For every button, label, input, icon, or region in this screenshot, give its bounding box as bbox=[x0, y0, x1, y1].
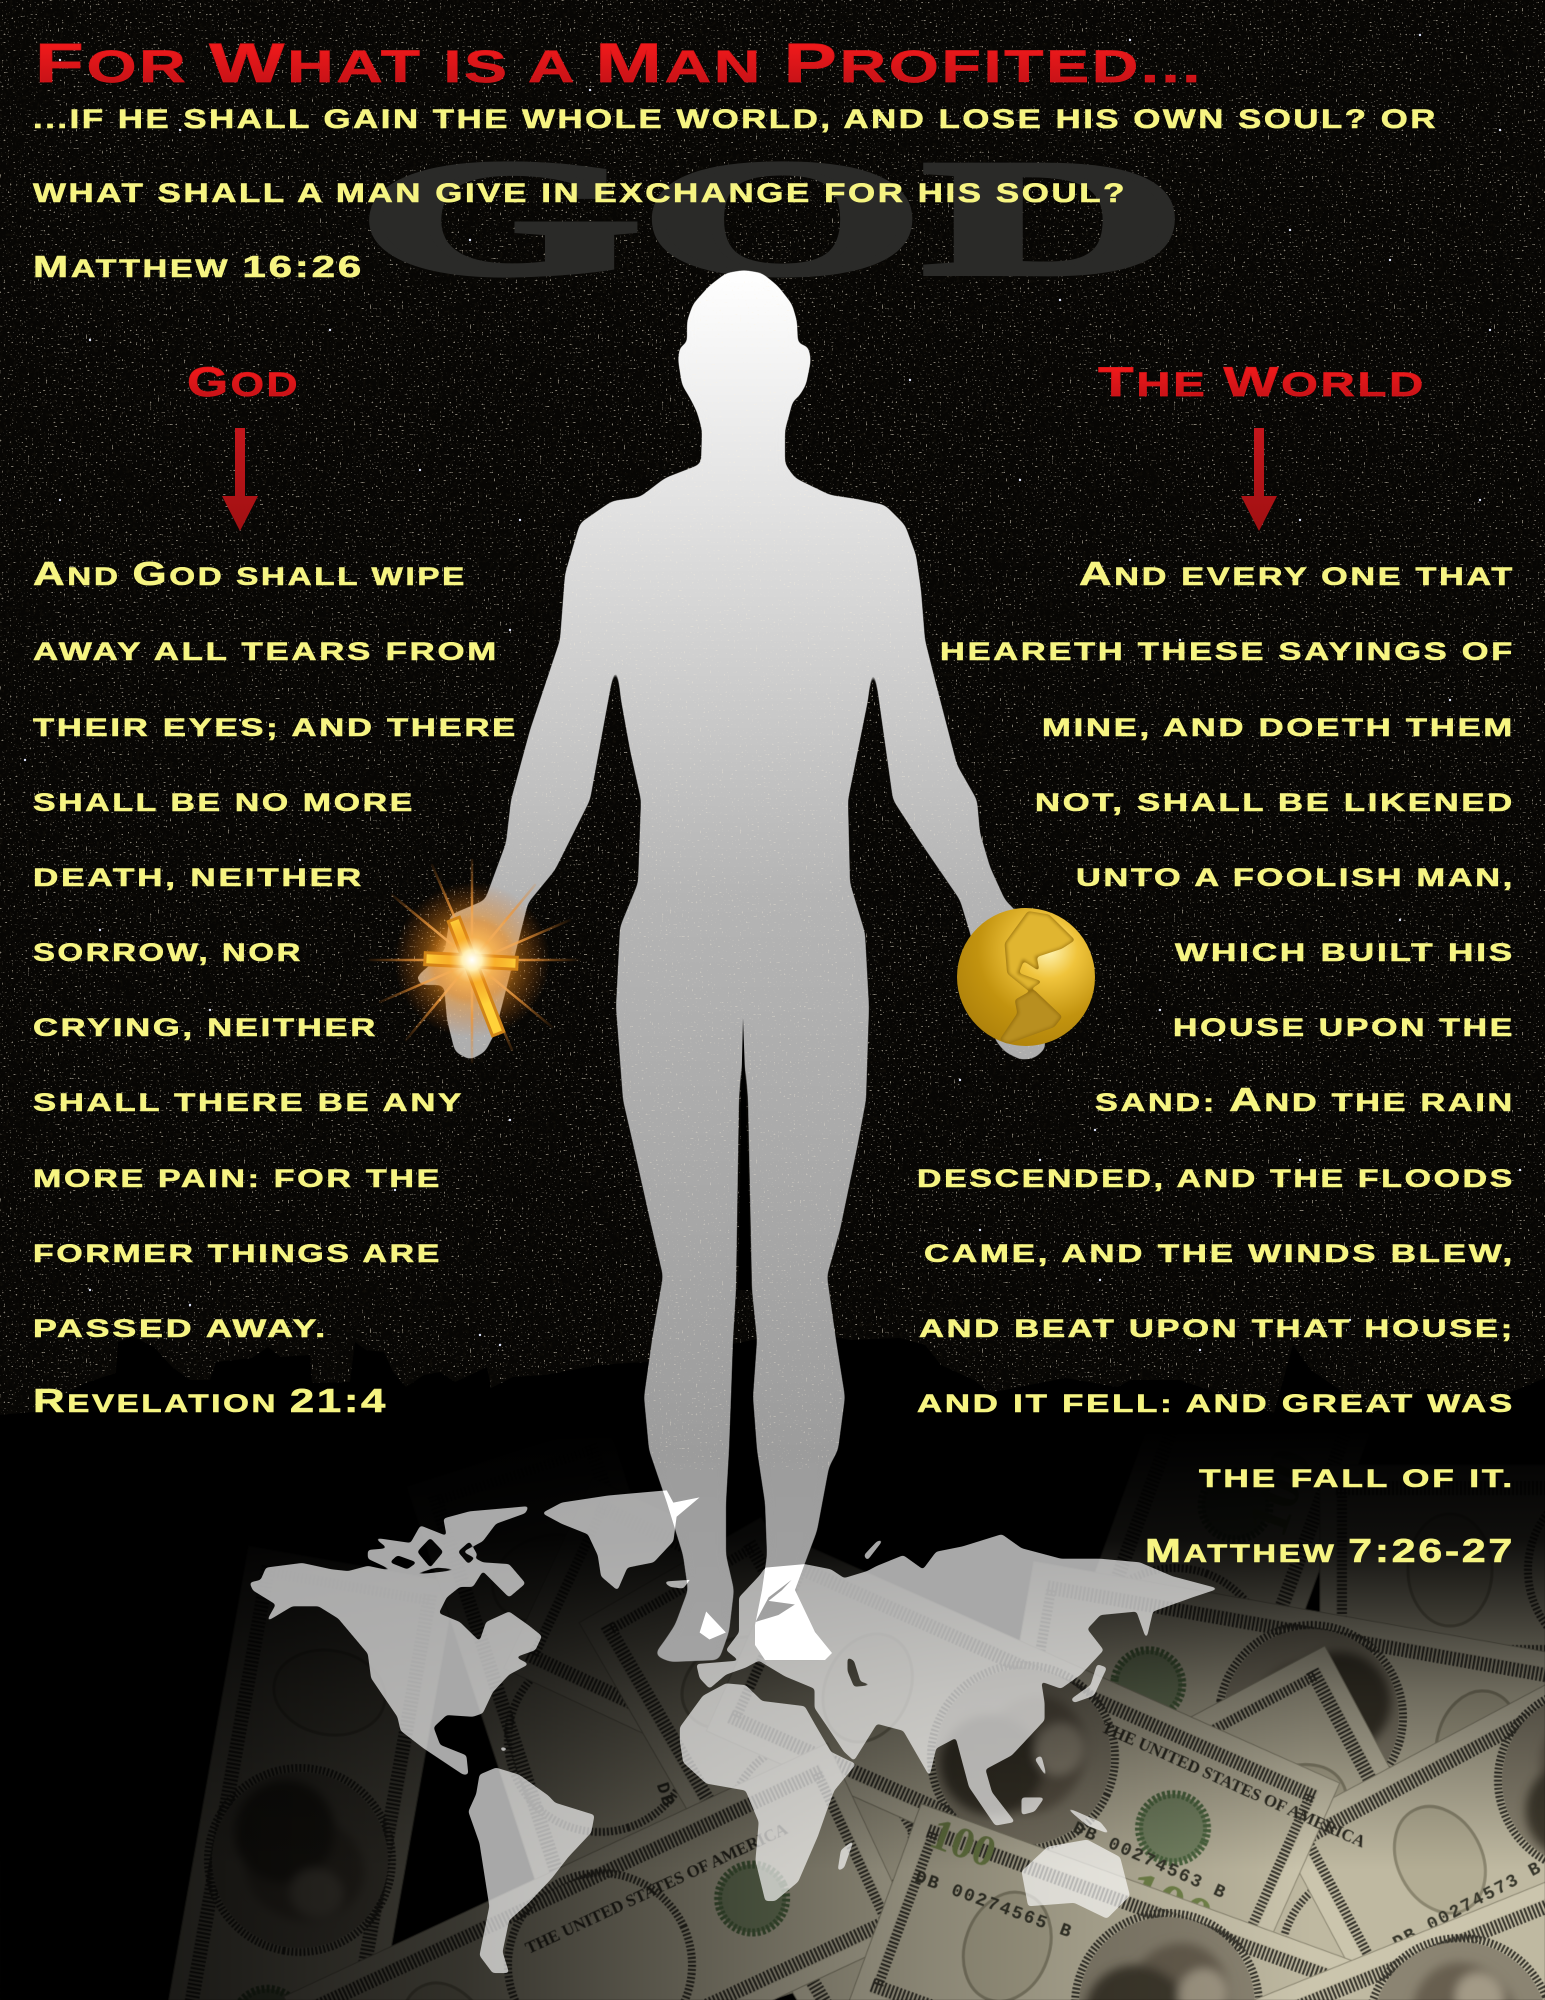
left verse: Revelation 21:4 bbox=[33, 555, 518, 1419]
map and silhouette overlap highlight bbox=[662, 1490, 832, 1660]
right verse: Matthew 7:26-27 bbox=[917, 555, 1515, 1569]
right verse: Matthew 7:26-27: NOT, SHALL BE LIKENED bbox=[1035, 789, 1515, 817]
left verse: Revelation 21:4: R EVELATION 21:4 bbox=[33, 1382, 388, 1419]
right verse: Matthew 7:26-27: HOUSE UPON THE bbox=[1173, 1014, 1515, 1042]
right verse: Matthew 7:26-27: A ND EVERY ONE THAT bbox=[1079, 555, 1515, 592]
right verse: Matthew 7:26-27: SAND: A ND THE RAIN bbox=[1095, 1081, 1515, 1118]
icon: glowing gold cross bbox=[370, 860, 580, 1062]
left verse: Revelation 21:4: FORMER THINGS ARE bbox=[33, 1240, 442, 1268]
left verse: Revelation 21:4: DEATH, NEITHER bbox=[33, 864, 364, 892]
right verse: Matthew 7:26-27: CAME, AND THE WINDS BLEW, bbox=[924, 1240, 1515, 1268]
money fade overlays bbox=[0, 1430, 1545, 2000]
right verse: Matthew 7:26-27: HEARETH THESE SAYINGS OF bbox=[940, 638, 1515, 666]
verse: Matthew 16:26 bbox=[33, 104, 1438, 284]
right verse: Matthew 7:26-27: AND IT FELL: AND GREAT WAS bbox=[917, 1390, 1515, 1418]
left verse: Revelation 21:4: PASSED AWAY. bbox=[33, 1315, 328, 1343]
left verse: Revelation 21:4: CRYING, NEITHER bbox=[33, 1014, 378, 1042]
verse: Matthew 16:26: M ATTHEW 16:26 bbox=[33, 249, 364, 284]
watermark: GOD: GOD bbox=[358, 128, 1186, 309]
left verse: Revelation 21:4: MORE PAIN: FOR THE bbox=[33, 1165, 442, 1193]
icon: gold globe bbox=[957, 908, 1095, 1046]
world map bbox=[250, 1490, 1219, 1973]
right verse: Matthew 7:26-27: AND BEAT UPON THAT HOUSE; bbox=[919, 1315, 1515, 1343]
right verse: Matthew 7:26-27: THE FALL OF IT. bbox=[1199, 1465, 1515, 1493]
left verse: Revelation 21:4: A ND G OD SHALL WIPE bbox=[33, 555, 467, 592]
arrow: God bbox=[222, 428, 258, 531]
right verse: Matthew 7:26-27: MINE, AND DOETH THEM bbox=[1042, 714, 1515, 742]
right verse: Matthew 7:26-27: WHICH BUILT HIS bbox=[1175, 939, 1515, 967]
left verse: Revelation 21:4: SHALL BE NO MORE bbox=[33, 789, 415, 817]
left verse: Revelation 21:4: THEIR EYES; AND THERE bbox=[33, 714, 518, 742]
right verse: Matthew 7:26-27: UNTO A FOOLISH MAN, bbox=[1076, 864, 1515, 892]
right verse: Matthew 7:26-27: M ATTHEW 7:26-27 bbox=[1145, 1532, 1515, 1569]
dark horizon silhouette bbox=[0, 1330, 1545, 2000]
left verse: Revelation 21:4: SORROW, NOR bbox=[33, 939, 303, 967]
money: pile of hundred dollar bills bbox=[0, 1430, 1545, 2000]
verse: Matthew 16:26: WHAT SHALL A MAN GIVE IN EXCHANGE FOR HIS SOUL? bbox=[33, 178, 1127, 208]
left verse: Revelation 21:4: AWAY ALL TEARS FROM bbox=[33, 638, 499, 666]
heading: The World: T HE W ORLD bbox=[1098, 358, 1426, 405]
verse: Matthew 16:26: ...IF HE SHALL GAIN THE WHOLE WORLD, AND LOSE HIS OWN SOUL? OR bbox=[33, 104, 1438, 134]
heading: God: G OD bbox=[187, 358, 300, 405]
left verse: Revelation 21:4: SHALL THERE BE ANY bbox=[33, 1089, 464, 1117]
arrow: The World bbox=[1241, 428, 1277, 531]
right verse: Matthew 7:26-27: DESCENDED, AND THE FLOODS bbox=[917, 1165, 1515, 1193]
title: F OR W HAT IS A M AN P ROFITED... bbox=[35, 31, 1203, 94]
human silhouette bbox=[400, 270, 1060, 1662]
